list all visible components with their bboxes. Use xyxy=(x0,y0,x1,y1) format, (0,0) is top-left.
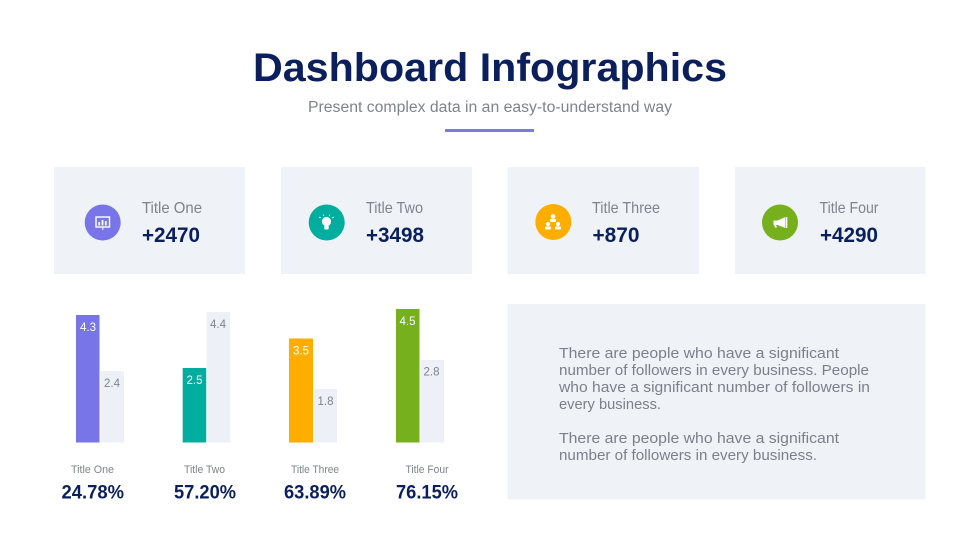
value: +4290 xyxy=(820,224,878,247)
value: +2470 xyxy=(142,224,200,247)
bar group: title four: 4.5 xyxy=(400,316,416,328)
icon: light bulb xyxy=(309,204,345,240)
bar group: title one: 4.3 xyxy=(80,322,96,334)
metric: title three: 63.89% xyxy=(284,482,346,504)
metric: title three xyxy=(284,464,346,504)
panel: stat card four xyxy=(735,167,926,274)
bar group: title three xyxy=(289,338,337,442)
bar chart xyxy=(76,309,444,442)
bar group: title two: 2.5 xyxy=(186,375,202,387)
bar group: title one: 2.4 xyxy=(104,378,121,390)
panel: stat card one xyxy=(54,167,245,274)
label: Title Two xyxy=(366,200,423,217)
text block: first paragraph: who have a significant number of followers in xyxy=(558,379,870,396)
text block: first paragraph: There are people who have a significant xyxy=(559,345,840,362)
metric: title one: Title One xyxy=(71,464,114,476)
text block: second paragraph: There are people who have a significant xyxy=(559,430,840,447)
metric: title four: 76.15% xyxy=(396,482,458,504)
icon: team hierarchy xyxy=(535,204,571,240)
text block: second paragraph: number of followers in every business. xyxy=(559,447,817,464)
text block: second paragraph xyxy=(559,430,840,464)
text block: first paragraph: number of followers in every business. People xyxy=(559,362,869,379)
bar group: title three: 1.8 xyxy=(318,396,334,408)
label: Title One xyxy=(142,200,202,217)
bar group: title three: 3.5 xyxy=(293,346,309,358)
bar group: title one xyxy=(76,315,124,442)
title: Dashboard Infographics xyxy=(253,46,727,90)
metric: title four: Title Four xyxy=(406,464,449,476)
metric: title two xyxy=(174,464,236,504)
label: Title Four xyxy=(820,200,879,217)
metric: title one xyxy=(62,464,124,504)
bar group: title four: 2.8 xyxy=(424,366,440,378)
bar group: title two xyxy=(183,312,230,442)
panel: description xyxy=(508,304,926,500)
subtitle: Present complex data in an easy-to-understand way xyxy=(308,99,672,116)
icon: presentation board xyxy=(85,204,121,240)
panel: stat card three xyxy=(508,167,699,274)
metric: title one: 24.78% xyxy=(62,482,124,504)
icon: megaphone xyxy=(762,204,798,240)
value: +3498 xyxy=(366,224,424,247)
label: Title Three xyxy=(592,200,660,217)
metric: title three: Title Three xyxy=(291,464,339,476)
text block: first paragraph: every business. xyxy=(559,396,661,413)
text block: first paragraph xyxy=(558,345,870,413)
metric: title two: Title Two xyxy=(184,464,225,476)
metric: title two: 57.20% xyxy=(174,482,236,504)
title underline xyxy=(445,129,534,132)
value: +870 xyxy=(592,224,640,247)
bar group: title four xyxy=(396,309,444,442)
metric: title four xyxy=(396,464,458,504)
bar group: title two: 4.4 xyxy=(210,319,227,331)
panel: stat card two xyxy=(281,167,472,274)
